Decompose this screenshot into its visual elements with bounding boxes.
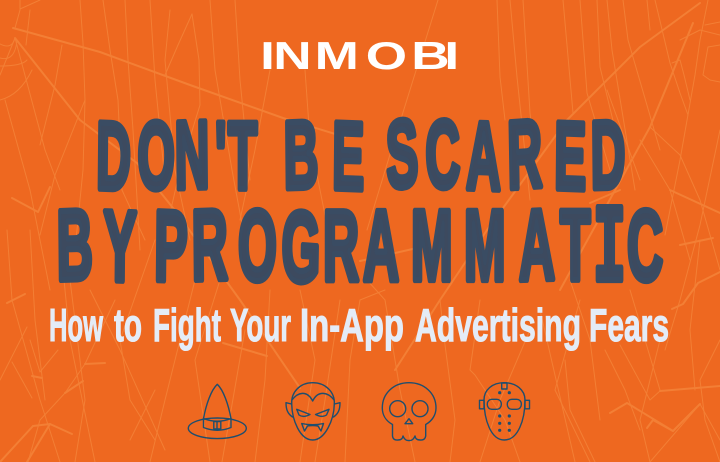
icon: skull: [382, 383, 436, 441]
subtitle: How to Fight Your In-App Advertising Fears: Your: [230, 299, 291, 351]
subtitle: How to Fight Your In-App Advertising Fears: to: [114, 299, 142, 351]
icon: hockey mask: [480, 383, 530, 440]
subtitle: How to Fight Your In-App Advertising Fears: Fears: [589, 299, 669, 351]
title line 2: BY PROGRAMMATIC: [56, 188, 663, 314]
logo: InMobi wordmark: INMOBI: [260, 34, 459, 77]
title: Don't Be Scared by Programmatic: [56, 99, 663, 314]
icon: vampire face: [286, 383, 340, 440]
subtitle: How to Fight Your In-App Advertising Fears: How: [49, 299, 103, 351]
subtitle: How to Fight Your In-App Advertising Fears: [49, 299, 669, 351]
subtitle: How to Fight Your In-App Advertising Fears: Fight: [153, 299, 221, 351]
subtitle: How to Fight Your In-App Advertising Fears: Advertising: [415, 299, 581, 351]
title line 1: DON'T BE SCARED: [96, 99, 626, 211]
subtitle: How to Fight Your In-App Advertising Fears: In-App: [300, 299, 404, 351]
icon: witch hat: [188, 384, 246, 439]
